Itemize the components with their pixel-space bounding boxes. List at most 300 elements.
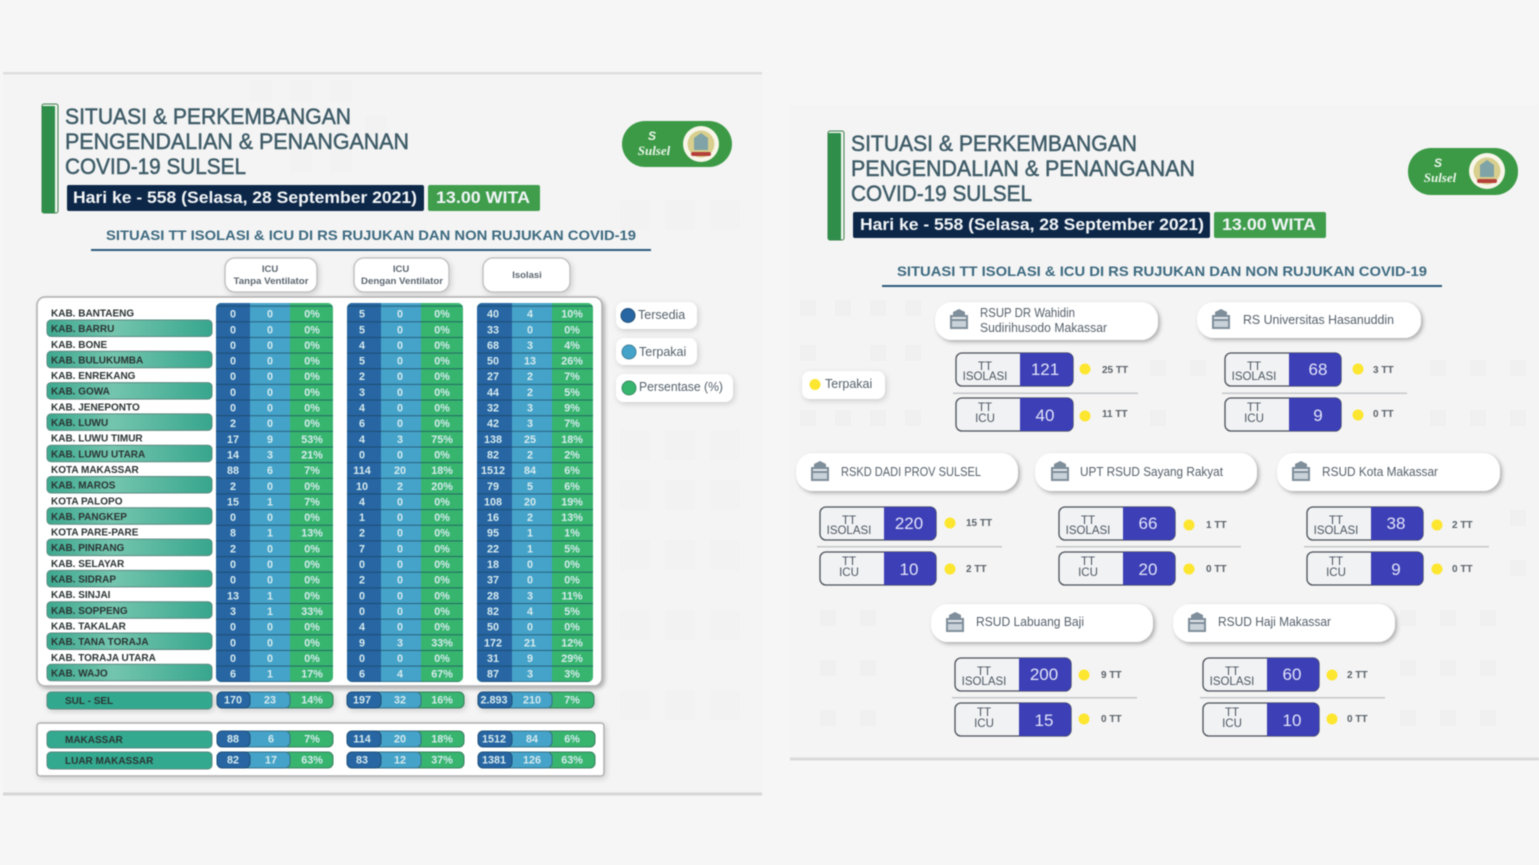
legend: terpakai yellow: Terpakai <box>825 377 872 391</box>
row: Kab. Pangkep: 13% <box>561 512 583 524</box>
row: Kab. Luwu Timur: 138 <box>484 434 502 446</box>
row: Kab. Gowa: 44 <box>487 387 499 399</box>
hospital: RSUP DR Wahidin: RSUP DR Wahidin <box>980 306 1075 320</box>
row: Kab. Gowa: 3 <box>359 387 365 399</box>
row: Kab. Barru: 0% <box>304 324 320 336</box>
row: Kab. Selayar <box>51 559 580 571</box>
hospital: RSUD Labuang Baji: RSUD Labuang Baji <box>976 615 1084 629</box>
row: Kota Pare-Pare: 0 <box>397 528 403 540</box>
row: Makassar: 114 <box>353 734 371 746</box>
time badge <box>1214 212 1326 238</box>
row: Kab. Sinjai: 28 <box>487 590 499 602</box>
row: Kab. Jeneponto: 0 <box>397 402 403 414</box>
row: Kab. Bone: 0% <box>434 340 450 352</box>
row: Kota Pare-Pare: 1 <box>267 528 273 540</box>
hospital: RSUP DR Wahidin: 25 TT <box>1102 365 1128 376</box>
hospital: RS Universitas Hasanuddin: ICU <box>1244 413 1264 425</box>
row: Kab. Luwu Utara: 0% <box>434 450 450 462</box>
row: Kab. Tana Toraja: 172 <box>484 637 502 649</box>
row: Kota Makassar: 84 <box>524 465 536 477</box>
row: Kab. Maros: 0 <box>267 481 273 493</box>
row: Makassar: MAKASSAR <box>65 735 124 746</box>
row: Kab. Luwu <box>47 414 580 430</box>
legend: terpakai <box>616 338 697 365</box>
row: Kab. Bulukumba: KAB. BULUKUMBA <box>51 355 143 366</box>
row: Kab. Wajo: 3% <box>564 669 580 681</box>
row: Kab. Bone: 4% <box>564 340 580 352</box>
row: Kab. Luwu: 3 <box>527 418 533 430</box>
row: Kab. Tana Toraja: 0% <box>304 637 320 649</box>
row: Kab. Pangkep: 16 <box>487 512 499 524</box>
row: Kab. Luwu: 0 <box>397 418 403 430</box>
hospital: UPT RSUD Sayang Rakyat: TT <box>1081 515 1095 527</box>
hospital: RSUD Kota Makassar <box>1277 453 1500 585</box>
row: Kab. Sinjai: 0% <box>434 590 450 602</box>
total row: Sul-Sel <box>47 692 594 709</box>
column header: ICU tanpa ventilator: Tanpa Ventilator <box>234 276 309 287</box>
row: Luar Makassar: 82 <box>227 754 239 766</box>
row: Kab. Maros: 2 <box>397 481 403 493</box>
row: Kab. Bulukumba <box>47 351 583 368</box>
row: Kab. Luwu Utara: 2% <box>564 450 580 462</box>
row: Luar Makassar: 1381 <box>482 754 506 766</box>
hospital: RSUP DR Wahidin <box>935 302 1158 431</box>
row: Kota Palopo: 0% <box>434 496 450 508</box>
row: Kab. Enrekang: 0% <box>434 371 450 383</box>
row: Kab. Gowa: 2 <box>527 387 533 399</box>
hospital: UPT RSUD Sayang Rakyat: 0 TT <box>1206 564 1227 575</box>
row: Kab. Luwu: 42 <box>487 418 499 430</box>
date bar: Hari ke - 558 (Selasa, 28 September 2021) <box>860 215 1204 234</box>
row: Kab. Toraja Utara: 0 <box>359 653 365 665</box>
hospital: RSUP DR Wahidin: Sudirihusodo Makassar <box>980 321 1107 335</box>
row: Kab. Takalar <box>51 622 580 634</box>
row: Makassar: 6% <box>564 734 580 746</box>
table block: ICU dengan ventilator <box>347 303 463 682</box>
hospital: RS Universitas Hasanuddin: 68 <box>1309 360 1327 379</box>
row: Kab. Bantaeng: 10% <box>561 309 583 321</box>
row: Kab. Pinrang: 0 <box>397 543 403 555</box>
row: Kota Palopo: 7% <box>304 496 320 508</box>
row: Kab. Wajo: 67% <box>431 669 453 681</box>
row: Kota Makassar: 6 <box>267 465 273 477</box>
logo badge: Sulsel <box>1424 170 1457 185</box>
row: Luar Makassar <box>47 752 595 769</box>
row: Kab. Jeneponto: 0% <box>304 402 320 414</box>
row: Kab. Bone: 68 <box>487 340 499 352</box>
row: Makassar: 7% <box>304 734 320 746</box>
total row: Sul-Sel: 170 <box>224 695 242 707</box>
row: Kab. Takalar: KAB. TAKALAR <box>51 622 127 632</box>
row: Kota Makassar: 6% <box>564 465 580 477</box>
row: Kab. Takalar: 0% <box>304 622 320 634</box>
legend: tersedia <box>616 302 697 329</box>
row: Kab. Wajo: KAB. WAJO <box>51 668 108 679</box>
row: Kab. Toraja Utara: 31 <box>487 653 499 665</box>
row: Luar Makassar: 83 <box>356 754 368 766</box>
row: Kab. Pinrang: 0% <box>304 543 320 555</box>
row: Kab. Selayar: 0% <box>304 559 320 571</box>
row: Kab. Selayar: 0 <box>267 559 273 571</box>
row: Kab. Tana Toraja: 3 <box>397 637 403 649</box>
row: Kab. Sidrap: KAB. SIDRAP <box>51 574 116 586</box>
row: Kota Pare-Pare: 1 <box>527 528 533 540</box>
accent bar <box>828 131 844 240</box>
total row: Sul-Sel: 32 <box>394 695 406 707</box>
row: Kab. Selayar: 0% <box>434 559 450 571</box>
row: Makassar: 6 <box>268 734 274 746</box>
left header <box>42 104 732 213</box>
row: Kab. Sinjai: 0 <box>359 590 365 602</box>
row: Kab. Toraja Utara: 29% <box>561 653 583 665</box>
row: Kab. Luwu Timur: 53% <box>301 434 323 446</box>
legend: persentase <box>616 374 733 402</box>
row: Kab. Pangkep: 0 <box>230 512 236 524</box>
hospital: RSUP DR Wahidin: ICU <box>975 413 995 425</box>
row: Kab. Pinrang: 0 <box>267 543 273 555</box>
row: Kab. Enrekang <box>51 371 580 383</box>
row: Luar Makassar: 37% <box>431 754 453 766</box>
row: Kab. Bulukumba: 0 <box>267 356 273 368</box>
row: Kab. Sidrap: 0 <box>230 575 236 587</box>
hospital: RSUP DR Wahidin: 121 <box>1031 360 1059 379</box>
row: Kab. Soppeng: 0% <box>434 606 450 618</box>
row: Makassar: 1512 <box>482 734 506 746</box>
hospital: UPT RSUD Sayang Rakyat: ISOLASI <box>1066 525 1110 537</box>
row: Kota Pare-Pare: 0% <box>434 528 450 540</box>
hospital: RSUD Haji Makassar: RSUD Haji Makassar <box>1218 615 1331 629</box>
row: Kab. Gowa: 0% <box>434 387 450 399</box>
row: Kab. Bone: 4 <box>359 340 365 352</box>
row: Kota Pare-Pare: KOTA PARE-PARE <box>51 528 139 539</box>
row: Kab. Soppeng: 1 <box>267 606 273 618</box>
total row: Sul-Sel: 14% <box>301 695 323 707</box>
row: Kota Pare-Pare: 2 <box>359 528 365 540</box>
row: Kab. Bone: 0 <box>230 340 236 352</box>
row: Kab. Maros: 10 <box>356 481 368 493</box>
row: Kab. Gowa: 0 <box>397 387 403 399</box>
hospital: RSUD Haji Makassar: 0 TT <box>1347 714 1368 725</box>
row: Kab. Takalar: 4 <box>359 622 365 634</box>
row: Kab. Maros: KAB. MAROS <box>51 481 116 492</box>
row: Kab. Bulukumba: 26% <box>561 356 583 368</box>
row: Kab. Sidrap: 0% <box>564 575 580 587</box>
row: Kab. Barru <box>47 320 580 336</box>
row: Kab. Barru: 33 <box>487 324 499 336</box>
row: Kab. Jeneponto: KAB. JENEPONTO <box>51 402 140 413</box>
hospital: RSUD Labuang Baji: 9 TT <box>1101 670 1122 681</box>
row: Kab. Wajo: 17% <box>301 669 323 681</box>
section heading left: SITUASI TT ISOLASI & ICU DI RS RUJUKAN DAN NON RUJUKAN COVID-19 <box>106 227 636 243</box>
row: Kab. Wajo: 1 <box>267 669 273 681</box>
hospital: RSUD Kota Makassar: TT <box>1329 515 1343 527</box>
row: Kota Makassar: 114 <box>353 465 371 477</box>
hospital: RSUP DR Wahidin: TT <box>978 361 992 373</box>
logo badge: Sulsel <box>638 143 671 158</box>
row: Kota Pare-Pare: 13% <box>301 528 323 540</box>
title: SITUASI & PERKEMBANGAN <box>851 131 1137 156</box>
row: Kota Makassar <box>51 465 580 477</box>
row: Kab. Tana Toraja: 21 <box>524 637 536 649</box>
hospital: RSUD Haji Makassar: TT <box>1225 707 1239 719</box>
row: Kab. Bone: 0 <box>397 340 403 352</box>
row: Kab. Luwu: KAB. LUWU <box>51 418 108 429</box>
row: Kab. Luwu Utara: 0 <box>397 450 403 462</box>
total row: Sul-Sel: 2.893 <box>480 695 508 707</box>
row: Luar Makassar: 63% <box>301 754 323 766</box>
hospital: RSKD Dadi: TT <box>842 556 856 568</box>
row: Kab. Bulukumba: 50 <box>487 356 499 368</box>
row: Kota Pare-Pare: 8 <box>230 528 236 540</box>
row: Kab. Pangkep: 1 <box>359 512 365 524</box>
row: Kab. Luwu: 7% <box>564 418 580 430</box>
row: Makassar: 84 <box>526 734 538 746</box>
hospital: RSUD Kota Makassar: 9 <box>1391 560 1401 579</box>
hospital: RSUD Labuang Baji: ISOLASI <box>962 676 1006 688</box>
row: Kab. Bulukumba: 13 <box>524 356 536 368</box>
row: Kab. Pinrang <box>47 539 580 556</box>
row: Kab. Luwu Timur: 25 <box>524 434 536 446</box>
column header: isolasi: Isolasi <box>512 270 542 281</box>
hospital: RSKD Dadi: 10 <box>900 560 918 579</box>
hospital: RSUP DR Wahidin: ISOLASI <box>963 371 1007 383</box>
row: Kab. Bulukumba: 0 <box>230 356 236 368</box>
row: Kab. Takalar: 0 <box>267 622 273 634</box>
row: Kab. Jeneponto: 0 <box>230 402 236 414</box>
hospital: RSUD Haji Makassar: ISOLASI <box>1210 676 1254 688</box>
column header: ICU tanpa ventilator <box>225 258 317 292</box>
row: Kab. Sidrap: 0 <box>527 575 533 587</box>
row: Kab. Bantaeng: 0% <box>434 309 450 321</box>
row: Kab. Bone: 3 <box>527 340 533 352</box>
row: Kab. Gowa <box>47 383 580 399</box>
row: Kab. Jeneponto <box>51 402 580 414</box>
hospital: RS Universitas Hasanuddin <box>1197 302 1421 431</box>
right header <box>828 131 1518 240</box>
row: Kab. Takalar: 0% <box>564 622 580 634</box>
row: Kab. Luwu Utara: 3 <box>267 450 273 462</box>
row: Kab. Sinjai: 1 <box>267 590 273 602</box>
row: Kab. Tana Toraja: 12% <box>561 637 583 649</box>
row: Kab. Luwu Timur: 18% <box>561 434 583 446</box>
row: Kab. Soppeng: KAB. SOPPENG <box>51 606 128 617</box>
row: Kab. Sinjai: 0% <box>304 590 320 602</box>
time badge: 13.00 WITA <box>436 188 530 207</box>
row: Kota Palopo <box>51 496 583 508</box>
hospital: RSUD Labuang Baji <box>931 604 1153 736</box>
hospital: RSKD Dadi: ISOLASI <box>827 525 871 537</box>
row: Kab. Luwu: 6 <box>359 418 365 430</box>
row: Kab. Sinjai: 3 <box>527 590 533 602</box>
row: Luar Makassar: 17 <box>265 754 277 766</box>
hospital: RSUD Kota Makassar: 38 <box>1387 514 1405 533</box>
row: Kab. Pangkep: 0 <box>267 512 273 524</box>
row: Kota Palopo: 19% <box>561 496 583 508</box>
hospital: RSUD Haji Makassar: 60 <box>1283 665 1301 684</box>
hospital: RSUD Kota Makassar: ISOLASI <box>1314 525 1358 537</box>
panel: regency table frame <box>37 297 602 686</box>
row: Kab. Pangkep <box>47 508 583 524</box>
total row: Sul-Sel: 23 <box>264 695 276 707</box>
total row: Sul-Sel: 7% <box>564 695 580 707</box>
row: Kab. Barru: 0 <box>230 324 236 336</box>
hospital: RSUD Kota Makassar: ICU <box>1326 567 1346 579</box>
panel: Makassar split <box>37 723 604 776</box>
row: Kab. Selayar: 18 <box>487 559 499 571</box>
row: Kab. Sidrap: 37 <box>487 575 499 587</box>
row: Kab. Bantaeng: KAB. BANTAENG <box>51 308 134 320</box>
date bar <box>853 212 1210 238</box>
hospital: UPT RSUD Sayang Rakyat: TT <box>1081 556 1095 568</box>
row: Kab. Soppeng: 5% <box>564 606 580 618</box>
row: Kab. Luwu Timur: 4 <box>359 434 365 446</box>
row: Kab. Soppeng <box>47 602 580 618</box>
row: Kab. Bantaeng <box>51 308 583 321</box>
hospital: RSUD Haji Makassar: 2 TT <box>1347 670 1368 681</box>
hospital: UPT RSUD Sayang Rakyat: 66 <box>1139 514 1157 533</box>
logo badge: S <box>1434 156 1442 170</box>
row: Kab. Barru: KAB. BARRU <box>51 324 114 335</box>
row: Kab. Soppeng: 4 <box>527 606 533 618</box>
row: Kab. Bantaeng: 0 <box>397 309 403 321</box>
row: Luar Makassar: 126 <box>523 754 541 766</box>
row: Kab. Takalar: 0% <box>434 622 450 634</box>
row: Kab. Toraja Utara: 0% <box>304 653 320 665</box>
row: Kab. Luwu: 2 <box>230 418 236 430</box>
row: Kab. Tana Toraja: 33% <box>431 637 453 649</box>
hospital: RSKD Dadi: 220 <box>895 514 923 533</box>
title <box>65 104 409 179</box>
legend: tersedia: Tersedia <box>638 308 685 322</box>
row: Kab. Luwu Utara: 14 <box>227 450 239 462</box>
row: Kab. Wajo: 3 <box>527 669 533 681</box>
row: Kab. Bone: 0% <box>304 340 320 352</box>
row: Kota Palopo: 1 <box>267 496 273 508</box>
row: Kab. Takalar: 0 <box>527 622 533 634</box>
row: Kota Makassar: KOTA MAKASSAR <box>51 465 140 476</box>
row: Kab. Maros: 20% <box>431 481 453 493</box>
accent bar <box>42 104 58 213</box>
row: Kab. Jeneponto: 3 <box>527 402 533 414</box>
hospital: RSUD Labuang Baji: 0 TT <box>1101 714 1122 725</box>
row: Kab. Sidrap: 0 <box>397 575 403 587</box>
title <box>851 131 1195 206</box>
row: Kab. Enrekang: 0% <box>304 371 320 383</box>
row: Kab. Luwu Utara: 2 <box>527 450 533 462</box>
hospital: RSUP DR Wahidin: TT <box>978 402 992 414</box>
row: Kab. Selayar: 0 <box>527 559 533 571</box>
row: Kab. Sidrap: 2 <box>359 575 365 587</box>
table block: ICU tanpa ventilator <box>216 303 333 682</box>
row: Kab. Gowa: 0 <box>267 387 273 399</box>
row: Kab. Bantaeng: 0 <box>267 309 273 321</box>
row: Kab. Pangkep: 0 <box>397 512 403 524</box>
row: Kab. Pinrang: 7 <box>359 543 365 555</box>
column header: isolasi <box>483 258 570 292</box>
row: Kab. Maros: 2 <box>230 481 236 493</box>
row: Kota Palopo: 0 <box>397 496 403 508</box>
date bar <box>67 185 424 211</box>
hospital: RS Universitas Hasanuddin: TT <box>1247 361 1261 373</box>
hospital: RS Universitas Hasanuddin: ISOLASI <box>1232 371 1276 383</box>
row: Kab. Bulukumba: 0% <box>434 356 450 368</box>
row: Kab. Sinjai <box>51 590 583 602</box>
row: Kota Makassar: 7% <box>304 465 320 477</box>
title: COVID-19 SULSEL <box>851 181 1032 206</box>
row: Kab. Takalar: 0 <box>230 622 236 634</box>
row: Kab. Gowa: 0 <box>230 387 236 399</box>
row: Kab. Jeneponto: 0 <box>267 402 273 414</box>
row: Kota Pare-Pare: 95 <box>487 528 499 540</box>
row: Kab. Bantaeng: 5 <box>359 309 365 321</box>
hospital: RSKD Dadi <box>796 453 1018 585</box>
hospital: RS Universitas Hasanuddin: 0 TT <box>1373 409 1394 420</box>
row: Kab. Enrekang: 2 <box>359 371 365 383</box>
hospital: RSUD Haji Makassar: ICU <box>1222 718 1242 730</box>
row: Kab. Tana Toraja <box>47 633 583 650</box>
row: Kab. Bantaeng: 40 <box>487 309 499 321</box>
hospital: RSUD Kota Makassar: 2 TT <box>1452 520 1473 531</box>
hospital: UPT RSUD Sayang Rakyat: 20 <box>1139 560 1157 579</box>
hospital: UPT RSUD Sayang Rakyat: UPT RSUD Sayang Rakyat <box>1080 465 1223 479</box>
hospital: RSUD Haji Makassar: 10 <box>1283 711 1301 730</box>
hospital: RSUD Haji Makassar: TT <box>1225 666 1239 678</box>
row: Kab. Tana Toraja: 9 <box>359 637 365 649</box>
row: Kab. Luwu Timur: 3 <box>397 434 403 446</box>
hospital: RSUD Kota Makassar: RSUD Kota Makassar <box>1322 465 1438 479</box>
row: Kab. Barru: 0% <box>564 324 580 336</box>
row: Kab. Barru: 0 <box>267 324 273 336</box>
row: Kab. Bantaeng: 0% <box>304 309 320 321</box>
row: Kab. Toraja Utara: 0 <box>230 653 236 665</box>
row: Kab. Gowa: KAB. GOWA <box>51 387 110 398</box>
row: Kab. Selayar: 0 <box>230 559 236 571</box>
section heading right: SITUASI TT ISOLASI & ICU DI RS RUJUKAN DAN NON RUJUKAN COVID-19 <box>897 263 1427 279</box>
row: Kab. Pangkep: 0% <box>304 512 320 524</box>
row: Kab. Bantaeng: 4 <box>527 309 533 321</box>
row: Kab. Barru: 0 <box>397 324 403 336</box>
row: Kab. Selayar: 0% <box>564 559 580 571</box>
row: Kota Makassar: 18% <box>431 465 453 477</box>
hospital: RSUD Labuang Baji: TT <box>977 666 991 678</box>
row: Kab. Barru: 0 <box>527 324 533 336</box>
time badge <box>428 185 540 211</box>
row: Kab. Bone <box>51 340 580 352</box>
row: Kab. Luwu: 0% <box>304 418 320 430</box>
row: Kab. Luwu Utara: 0 <box>359 450 365 462</box>
column header: ICU tanpa ventilator: ICU <box>262 264 278 275</box>
row: Kab. Luwu Timur: 17 <box>227 434 239 446</box>
row: Kab. Enrekang: 27 <box>487 371 499 383</box>
row: Kab. Sidrap: 0% <box>304 575 320 587</box>
column header: ICU dengan ventilator: Dengan Ventilator <box>361 276 443 287</box>
row: Kab. Luwu Timur: 75% <box>431 434 453 446</box>
row: Luar Makassar: 12 <box>394 754 406 766</box>
hospital: RSUD Labuang Baji: TT <box>977 707 991 719</box>
time badge: 13.00 WITA <box>1222 215 1316 234</box>
row: Kab. Pinrang: 22 <box>487 543 499 555</box>
row: Kota Palopo: KOTA PALOPO <box>51 496 123 507</box>
hospital: UPT RSUD Sayang Rakyat: ICU <box>1078 567 1098 579</box>
row: Kab. Bulukumba: 0% <box>304 356 320 368</box>
row: Kab. Pangkep: KAB. PANGKEP <box>51 512 127 523</box>
row: Makassar: 20 <box>394 734 406 746</box>
row: Kab. Barru: 5 <box>359 324 365 336</box>
title: PENGENDALIAN & PENANGANAN <box>65 129 409 154</box>
row: Kab. Selayar: 0 <box>397 559 403 571</box>
row: Kab. Luwu Utara: 82 <box>487 450 499 462</box>
row: Kab. Tana Toraja: KAB. TANA TORAJA <box>51 637 149 648</box>
